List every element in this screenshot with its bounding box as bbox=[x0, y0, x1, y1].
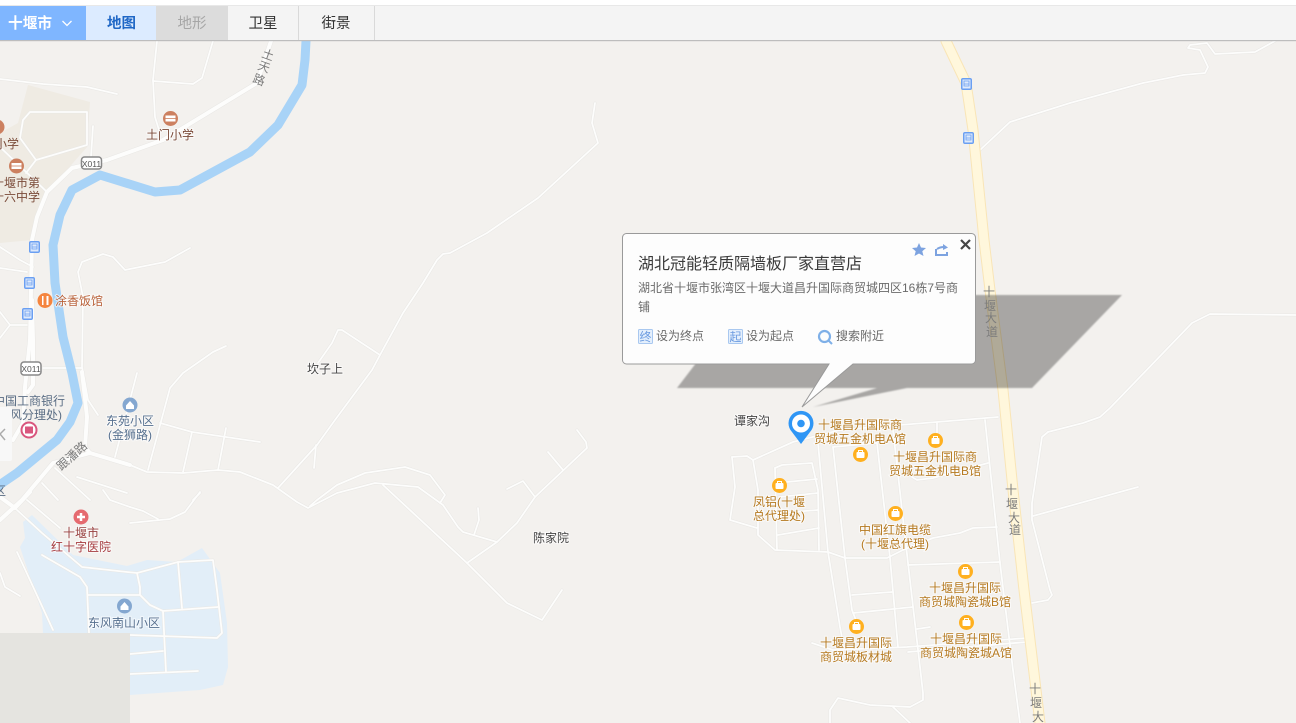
poi: 东苑小区: 东苑小区 bbox=[106, 414, 154, 428]
popup title: 湖北冠能轻质隔墙板厂家直营店 bbox=[638, 255, 862, 273]
poi: 中国红旗电缆: (十堰总代理) bbox=[861, 537, 929, 551]
poi: 土门小学 bbox=[146, 111, 194, 142]
place label: 陈家院: 陈家院 bbox=[533, 530, 569, 545]
poi: 中国工商银行 bbox=[0, 393, 65, 438]
road label: 土天路: 路 bbox=[251, 70, 267, 89]
poi: 中国红旗电缆 bbox=[859, 506, 931, 551]
poi: 陶瓷城A馆 bbox=[920, 615, 1012, 660]
side panel handle bbox=[0, 407, 12, 461]
poi: 中国工商银行: 风分理处) bbox=[10, 408, 62, 422]
icon: bus stop bbox=[29, 241, 40, 253]
poi: 土门小学: 土门小学 bbox=[146, 127, 194, 142]
poi: 十堰市红十字医院: 红十字医院 bbox=[51, 539, 111, 554]
road label: 十堰大道 middle: 大 bbox=[1008, 511, 1020, 525]
unloaded map tile bbox=[0, 633, 130, 723]
icon: bus stop bbox=[963, 132, 974, 144]
icon: bus stop bbox=[961, 78, 972, 90]
residential area: 东风南山小区 bbox=[20, 515, 228, 695]
tab: 街景: 街景 bbox=[322, 15, 350, 32]
action: 设为起点: 设为起点 bbox=[746, 329, 794, 343]
popup body bbox=[622, 234, 976, 407]
campus area bbox=[0, 85, 90, 243]
poi: 东风南山小区 bbox=[88, 598, 160, 630]
poi: 十堰昌升国际商贸城五金机电A馆 bbox=[814, 417, 906, 462]
poi: 东苑小区: (金狮路) bbox=[108, 427, 152, 442]
poi: 十堰市红十字医院: 十堰市 bbox=[63, 525, 99, 540]
road label: 十堰大道 middle: 堰 bbox=[1006, 497, 1018, 511]
road label: 土天路: 天 bbox=[256, 58, 272, 76]
icon: location pin bbox=[788, 411, 813, 444]
shield: X011 top: X011 bbox=[82, 159, 101, 169]
tab: 地形: 地形 bbox=[178, 15, 207, 32]
road label: 土天路 bbox=[251, 46, 276, 89]
action: 设为终点: 设为终点 bbox=[656, 328, 704, 343]
poi: 十堰市红十字医院 bbox=[51, 510, 111, 554]
info window shadow bbox=[677, 295, 1122, 407]
icon: bus stop bbox=[22, 308, 33, 320]
road label: 十堰大道 south bbox=[1029, 682, 1044, 723]
icon: bus stop bbox=[24, 277, 35, 289]
poi: 十堰昌升国际商贸城五金机电A馆: 十堰昌升国际商 bbox=[818, 417, 902, 432]
river bbox=[0, 41, 306, 488]
action: 设为起点 bbox=[728, 329, 794, 344]
info window bbox=[622, 234, 976, 407]
poi: 板材城: 十堰昌升国际 bbox=[820, 636, 892, 650]
poi: 板材城: 商贸城板材城 bbox=[820, 649, 892, 664]
road label: 十堰大道 north: 大 bbox=[985, 311, 997, 325]
poi: 陶瓷城A馆: 十堰昌升国际 bbox=[930, 632, 1002, 646]
poi: 陶瓷城B馆: 商贸城陶瓷城B馆 bbox=[919, 594, 1011, 609]
popup address: 湖北省十堰市张湾区十堰大道昌升国际商贸城四区16栋7号商 bbox=[638, 280, 958, 295]
poi: 凤铝: 总代理处) bbox=[753, 509, 805, 523]
poi: 涂香饭馆: 涂香饭馆 bbox=[55, 293, 103, 308]
road label: 土天路: 土 bbox=[260, 46, 276, 64]
poi: 东风南山小区: 东风南山小区 bbox=[88, 615, 160, 630]
tab: 卫星: 卫星 bbox=[248, 16, 278, 32]
poi: 陶瓷城A馆: 商贸城陶瓷城A馆 bbox=[920, 645, 1012, 660]
tab: 地形 bbox=[156, 6, 228, 40]
poi: 凤铝: 凤铝(十堰 bbox=[753, 494, 805, 509]
road label: 十堰大道 north bbox=[983, 285, 998, 339]
action: 设为终点 bbox=[638, 328, 704, 344]
poi: 小学 bbox=[0, 120, 19, 151]
action: 设为起点: 起 bbox=[730, 330, 742, 344]
poi: 陶瓷城B馆 bbox=[919, 564, 1011, 609]
popup address bbox=[638, 280, 958, 314]
poi: 十堰昌升国际商贸城五金机电B馆: 十堰昌升国际商 bbox=[893, 449, 977, 464]
place label: 坎子上: 坎子上 bbox=[307, 362, 343, 376]
tab: 卫星 bbox=[248, 6, 299, 40]
main road: 十堰大道 bbox=[946, 41, 1040, 723]
road label: 十堰大道 north: 道 bbox=[986, 325, 998, 339]
poi: 凤铝 bbox=[753, 478, 805, 523]
place label: 谭家沟: 谭家沟 bbox=[734, 413, 770, 428]
road label: 十堰大道 north: 十 bbox=[983, 285, 995, 299]
road label: 十堰大道 north: 堰 bbox=[984, 299, 996, 313]
road label: 十堰大道 middle: 道 bbox=[1009, 523, 1021, 537]
popup address: 铺 bbox=[638, 300, 650, 314]
poi: 中国红旗电缆: 中国红旗电缆 bbox=[859, 522, 931, 537]
action: 搜索附近: 搜索附近 bbox=[836, 328, 884, 343]
shield: X011 lower: X011 bbox=[21, 364, 41, 374]
road label: 十堰大道 middle: 十 bbox=[1005, 483, 1017, 497]
action: 设为终点: 终 bbox=[640, 329, 652, 344]
action: 搜索附近 bbox=[819, 328, 884, 344]
road label: 十堰大道 middle bbox=[1005, 483, 1021, 537]
toolbar bbox=[0, 0, 1296, 41]
city selector bbox=[0, 6, 86, 40]
tab: 地图 bbox=[86, 6, 156, 40]
poi: 十堰市第十六中学 bbox=[0, 158, 40, 204]
icon: close bbox=[961, 240, 970, 249]
city selector: 十堰市 bbox=[8, 14, 52, 32]
poi: 陶瓷城B馆: 十堰昌升国际 bbox=[929, 581, 1001, 595]
road label: 十堰大道 south: 堰 bbox=[1030, 696, 1042, 710]
poi: 板材城 bbox=[820, 619, 892, 664]
icon: share bbox=[936, 244, 948, 255]
tab: 街景 bbox=[322, 6, 375, 40]
road label: 跟潘路: 跟潘路 bbox=[53, 438, 90, 473]
poi: 十堰昌升国际商贸城五金机电B馆 bbox=[889, 433, 981, 478]
icon: favourite star bbox=[912, 243, 926, 256]
poi: 东苑小区 bbox=[106, 398, 154, 442]
road label: 十堰大道 south: 十 bbox=[1029, 682, 1041, 696]
poi: 十堰昌升国际商贸城五金机电B馆: 贸城五金机电B馆 bbox=[889, 463, 981, 478]
poi: 涂香饭馆 bbox=[38, 293, 103, 308]
poi: 十堰昌升国际商贸城五金机电A馆: 贸城五金机电A馆 bbox=[814, 431, 906, 446]
tab: 地图: 地图 bbox=[107, 15, 136, 32]
